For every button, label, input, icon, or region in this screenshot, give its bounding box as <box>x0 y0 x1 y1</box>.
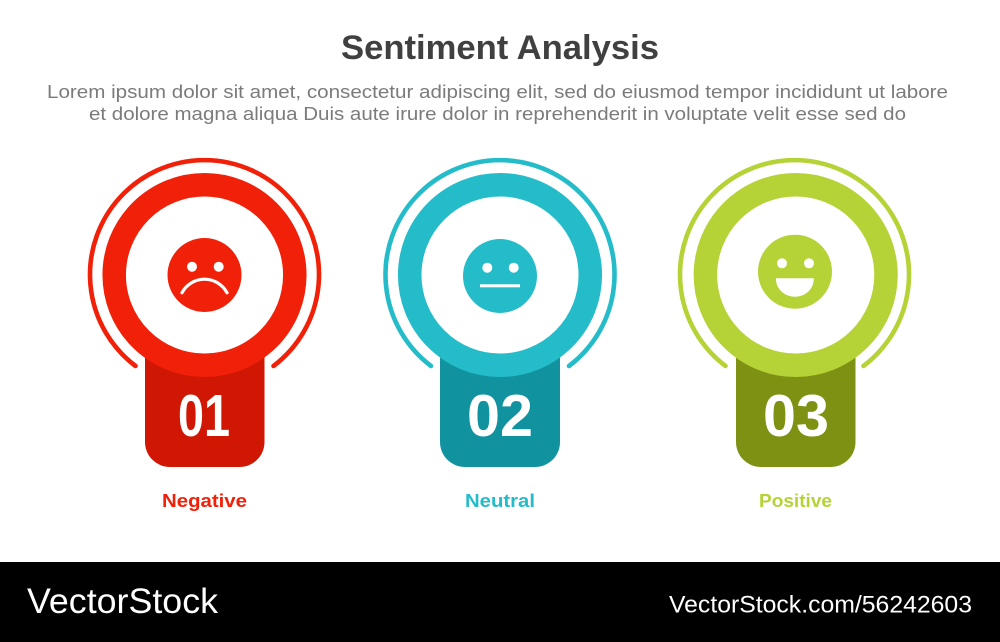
icon: happy face <box>758 235 832 309</box>
description text: et dolore magna aliqua Duis aute irure dolor in reprehenderit in voluptate velit esse sed do <box>89 103 906 124</box>
footer url text: VectorStock.com/56242603 <box>669 592 972 618</box>
label: Positive: Positive <box>759 490 832 511</box>
description text: Lorem ipsum dolor sit amet, consectetur adipiscing elit, sed do eiusmod tempor incididunt ut labore <box>47 81 948 102</box>
outer arc: neutral <box>386 160 614 366</box>
icon: sad face <box>168 238 242 312</box>
title: Sentiment Analysis <box>341 29 659 67</box>
footer bar <box>0 562 1000 642</box>
icon: neutral face <box>463 239 537 313</box>
outer arc: negative <box>90 160 319 366</box>
ring: neutral <box>410 185 590 365</box>
ring: negative <box>114 185 295 365</box>
number tab: negative <box>145 340 264 467</box>
ring: positive <box>705 185 886 365</box>
footer logo text: VectorStock <box>27 582 219 621</box>
number tab: neutral <box>440 340 560 467</box>
panel: positive <box>680 160 909 511</box>
outer arc: positive <box>680 160 909 366</box>
number: 01: 01 <box>178 383 230 449</box>
label: Neutral: Neutral <box>465 490 535 511</box>
description text <box>47 81 948 124</box>
number tab: positive <box>736 340 856 467</box>
label: Negative: Negative <box>162 490 247 511</box>
number: 03: 03 <box>763 383 829 449</box>
panel: negative <box>90 160 319 511</box>
panel: neutral <box>386 160 614 511</box>
number: 02: 02 <box>467 383 533 449</box>
